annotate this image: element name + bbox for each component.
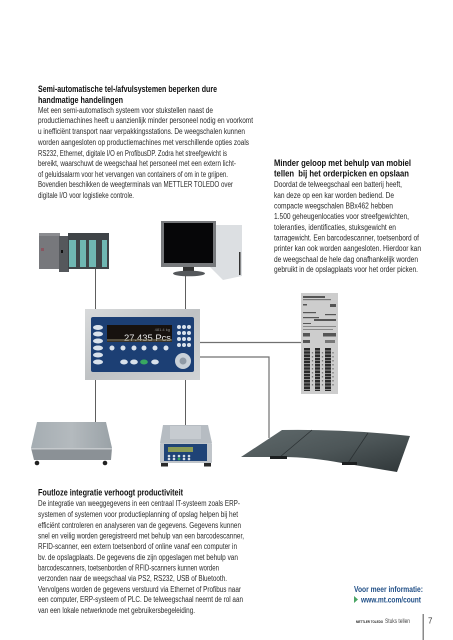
body text: semi-automatic systems: bereikt, waarschuwt de weegschaal het personeel met een extern licht- (38, 159, 236, 168)
terminal display: 27.435 Pcs (124, 333, 172, 343)
footer divider and page number (422, 614, 433, 640)
body text: mobile counting: 1.500 geheugenlocaties voor streefgewichten, (274, 212, 409, 221)
body text: mobile counting: gebruikt in de opslagplaats voor het order picken. (274, 265, 418, 274)
icon: floor scale (241, 430, 410, 472)
terminal display: 481.4 kg (155, 327, 170, 332)
body text: error-free integration (38, 499, 244, 615)
body text: mobile counting: de weegschaal de hele dag onafhankelijk worden (274, 255, 418, 264)
footer divider and page number: 7 (428, 616, 433, 626)
icon: weighing terminal (85, 309, 200, 380)
footer: brand and section name: Stuks tellen (385, 618, 410, 625)
body text: error-free integration: Vervolgens worden de gegevens verstuurd via Ethernet of Profibus naar (38, 585, 241, 594)
icon: computer monitor and tower (161, 221, 242, 280)
body text: error-free integration: een computer, ERP-systeem of PLC. De telweegschaal neemt de rol aan (38, 595, 243, 604)
footer: brand and section name: METTLER TOLEDO (356, 619, 383, 624)
callout: more information link: Voor meer informatie: (354, 585, 423, 594)
heading: semi-automatic systems: Semi-automatische tel-/afvulsystemen beperken dure (38, 84, 217, 94)
terminal buttons (93, 325, 191, 369)
connector lines between terminal and devices (96, 268, 301, 438)
body text: mobile counting: printer kan ook worden aangesloten. Hierdoor kan (274, 244, 421, 253)
footer: brand and section name (356, 618, 410, 625)
icon: compact counting scale (160, 425, 212, 466)
body text: semi-automatic systems: Bovendien beschikken de weegterminals van METTLER TOLEDO over (38, 180, 233, 189)
text block: error-free integration (38, 488, 244, 615)
icon: printed label with barcodes (301, 293, 338, 394)
callout: more information link: www.mt.com/count (360, 596, 421, 604)
body text: semi-automatic systems: worden aangesloten op productiemachines met verschillende opties zoals (37, 138, 249, 147)
body text: error-free integration: snel en veilig worden geregistreerd met behulp van een barcodescanner, (38, 532, 244, 540)
heading: error-free integration: Foutloze integratie verhoogt productiviteit (38, 488, 183, 498)
body text: mobile counting: Doordat de telweegschaal een batterij heeft, (274, 180, 402, 189)
body text: semi-automatic systems: digitale I/O voor logistieke controle. (38, 191, 134, 200)
body text: mobile counting: tarragewicht. Een barcodescanner, toetsenbord of (274, 234, 420, 242)
body text: error-free integration: van een lokale netwerknode met gebruikersbegeleiding. (38, 606, 195, 615)
icon: green arrow (354, 596, 358, 603)
body text: semi-automatic systems: u inefficiënt transport naar verpakkingsstations. De weegschalen kunnen (38, 127, 245, 136)
heading: semi-automatic systems (38, 84, 217, 105)
body text: semi-automatic systems: RS232, Ethernet, digitale I/O en ProfibusDP. Zodra het streefgewicht is (38, 149, 227, 158)
body text: semi-automatic systems (37, 106, 254, 200)
body text: error-free integration: verzonden naar de weegschaal via PS2, RS232, USB of Bluetooth. (38, 574, 227, 583)
body text: error-free integration: bv. de opslagplaats. De gegevens die zijn opgeslagen met behulp van (38, 553, 238, 562)
icon: bench scale (31, 422, 112, 465)
terminal display (107, 325, 172, 343)
body text: mobile counting (274, 180, 421, 274)
body text: error-free integration: RFID-scanner, een extern toetsenbord of online vanaf een computer in (38, 542, 237, 551)
body text: error-free integration: barcodescanners, toetsenborden of RFID-scanners kunnen worden (38, 564, 219, 572)
callout: more information link (354, 585, 423, 604)
body text: mobile counting: compacte weegschalen BBx462 hebben (274, 202, 393, 210)
body text: semi-automatic systems: productiemachines heeft u aanzienlijk minder personeel nodig en voorkomt (38, 116, 254, 125)
body text: mobile counting: toleranties, identificaties, stuksgewicht en (274, 223, 396, 232)
body text: error-free integration: systemen of systemen voor productieplanning of opslag helpen bij het (38, 510, 239, 519)
body text: mobile counting: kan deze op een kar worden bediend. De (274, 191, 394, 200)
body text: semi-automatic systems: Met een semi-automatisch systeem voor stukstellen naast de (38, 106, 213, 115)
heading: mobile counting: Minder geloop met behulp van mobiel (274, 158, 411, 168)
terminal blue panel (91, 317, 194, 372)
heading: mobile counting (274, 158, 411, 178)
text block: mobile counting (274, 158, 421, 274)
body text: semi-automatic systems: of geluidsalarm voor het vervangen van containers of om in te grijpen. (38, 170, 228, 179)
text block: semi-automatic systems (37, 84, 254, 200)
heading: mobile counting: tellen bij het orderpicken en opslaan (274, 168, 409, 178)
heading: semi-automatic systems: handmatige handelingen (38, 95, 123, 105)
body text: error-free integration: efficiënt controleren en analyseren van de gegevens. Gegevens kunnen (38, 521, 241, 530)
body text: error-free integration: De integratie van weeggegevens in een centraal IT-systeem zoals ERP- (38, 499, 240, 508)
icon: PLC controller (39, 233, 109, 272)
